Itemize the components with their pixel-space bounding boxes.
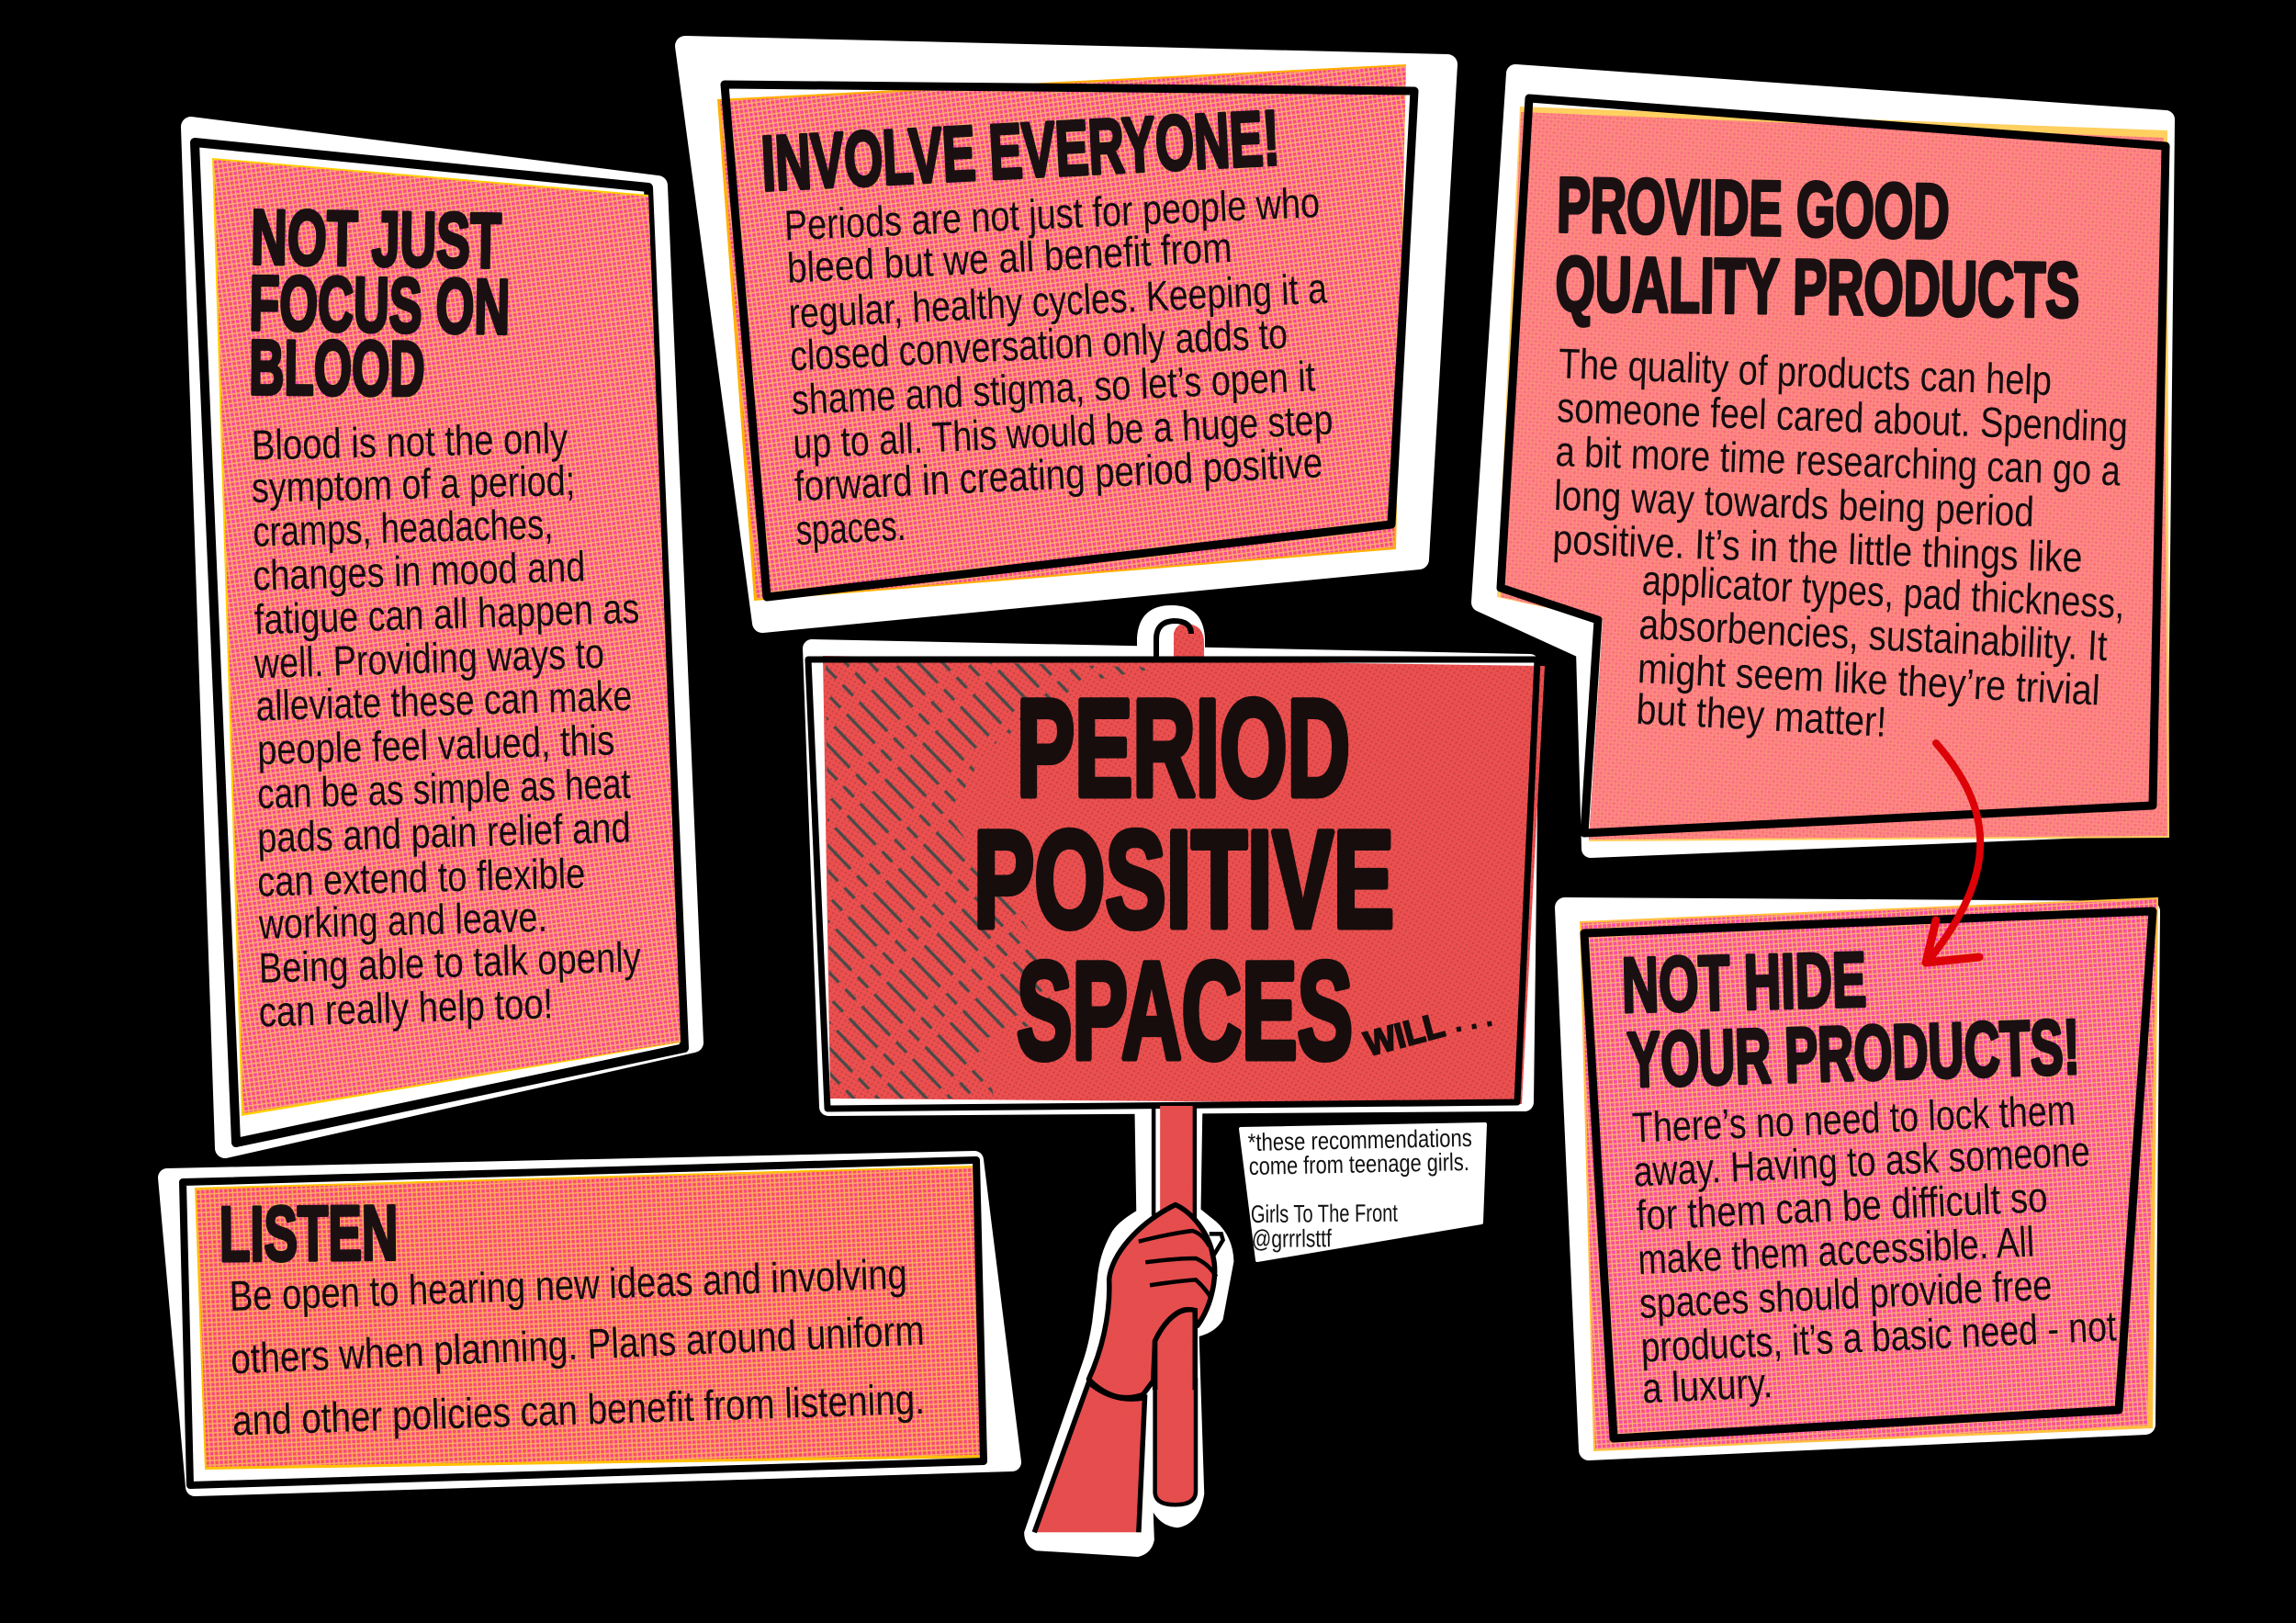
text: panel 1 heading and body: can be as simple as heat	[256, 760, 631, 817]
sign board	[808, 621, 1545, 1109]
pole	[1155, 1106, 1196, 1505]
text: panel 4 heading and body: There’s no need to lock them	[1631, 1086, 2077, 1152]
text: panel 1 heading and body: people feel valued, this	[256, 716, 615, 773]
title: period positive spaces: WILL	[1360, 1006, 1448, 1065]
text: panel 3 heading and body: a bit more time researching can go a	[1555, 427, 2122, 494]
pole inside fist	[1155, 1310, 1195, 1390]
text: panel 3 heading and body: but they matter!	[1635, 685, 1887, 746]
panel: not just focus on blood	[191, 127, 693, 1148]
text: panel 3 heading and body: PROVIDE GOOD	[1557, 162, 1950, 254]
text: panel 5 heading and body	[219, 1189, 926, 1445]
title: period positive spaces: PERIOD	[1017, 671, 1350, 825]
text: panel 1 heading and body: pads and pain relief and	[256, 804, 631, 862]
fingers	[1139, 1231, 1223, 1298]
text: panel 1 heading and body: cramps, headaches,	[253, 500, 554, 556]
text: panel 3 heading and body: absorbencies, sustainability. It	[1638, 600, 2109, 670]
footnote: @grrrlsttf	[1252, 1224, 1332, 1253]
text: panel 2 heading and body	[760, 95, 1334, 554]
text: panel 2 heading and body: up to all. This would be a huge step	[792, 395, 1334, 468]
text: panel 1 heading and body: BLOOD	[249, 324, 425, 412]
text: panel 1 heading and body: working and leave.	[257, 893, 547, 948]
text: panel 4 heading and body: NOT HIDE	[1621, 936, 1867, 1029]
text: panel 3 heading and body: might seem like they’re trivial	[1637, 644, 2101, 715]
title: period positive spaces: SPACES	[1017, 933, 1353, 1088]
sign with pole and hand	[808, 605, 1545, 1557]
text: panel 2 heading and body: regular, healthy cycles. Keeping it a	[787, 265, 1328, 337]
text: panel 4 heading and body: make them accessible. All	[1637, 1218, 2035, 1283]
text: panel 4 heading and body: for them can be difficult so	[1636, 1173, 2049, 1239]
white outline of pole, hand and arm	[1024, 1105, 1233, 1557]
text: panel 4 heading and body: a luxury.	[1641, 1358, 1773, 1412]
text: panel 3 heading and body: The quality of products can help	[1558, 339, 2053, 404]
arrow: red arrow from panel 3 to panel 4	[1926, 743, 1980, 963]
text: panel 3 heading and body: long way towards being period	[1553, 471, 2035, 535]
text: panel 5 heading and body: and other policies can benefit from listening.	[231, 1375, 926, 1445]
text: panel 2 heading and body: bleed but we all benefit from	[786, 223, 1232, 292]
title: period positive spaces: . . .	[1449, 996, 1496, 1040]
text: panel 1 heading and body: can really help too!	[258, 979, 554, 1036]
title: period positive spaces: POSITIVE	[974, 802, 1394, 956]
text: panel 1 heading and body: symptom of a period;	[251, 456, 576, 512]
text: panel 2 heading and body: spaces.	[794, 502, 906, 554]
text: panel 5 heading and body: LISTEN	[219, 1189, 399, 1278]
text: panel 1 heading and body: Being able to talk openly	[258, 932, 642, 992]
text: panel 4 heading and body: away. Having to ask someone	[1632, 1127, 2091, 1195]
text: panel 5 heading and body: Be open to hearing new ideas and involving	[229, 1250, 907, 1320]
white outline of pole top	[1137, 605, 1205, 666]
text: panel 4 heading and body: products, it’s a basic need - not	[1639, 1302, 2118, 1371]
footnote	[1241, 1124, 1485, 1260]
fist	[1088, 1205, 1215, 1398]
panel: not hide your products	[1565, 897, 2158, 1451]
text: panel 1 heading and body: changes in mood and	[253, 542, 586, 600]
panel: provide good quality products	[1480, 73, 2169, 849]
text: panel 2 heading and body: closed conversation only adds to	[789, 310, 1289, 379]
footnote: *these recommendations	[1247, 1124, 1472, 1156]
text: panel 3 heading and body: applicator types, pad thickness,	[1641, 556, 2126, 627]
text: panel 4 heading and body: spaces should provide free	[1638, 1261, 2053, 1327]
panel: involve everyone	[685, 46, 1447, 623]
title: period positive spaces	[974, 671, 1496, 1088]
text: panel 1 heading and body: can extend to flexible	[257, 849, 586, 906]
icon: pole top above sign	[1156, 621, 1204, 663]
hand holding pole	[1034, 1106, 1223, 1532]
footnote: come from teenage girls.	[1248, 1148, 1469, 1180]
sleeve	[1034, 1382, 1144, 1532]
text: panel 3 heading and body: positive. It’s in the little things like	[1552, 515, 2083, 581]
text: panel 2 heading and body: INVOLVE EVERYONE!	[760, 95, 1281, 207]
text: panel 4 heading and body	[1621, 936, 2118, 1412]
text: panel 1 heading and body: well. Providing ways to	[253, 629, 605, 687]
text: panel 3 heading and body	[1552, 162, 2129, 746]
text: panel 1 heading and body: Blood is not the only	[251, 414, 568, 469]
footnote: Girls To The Front	[1251, 1200, 1398, 1228]
text: panel 2 heading and body: shame and stigma, so let’s open it	[791, 352, 1316, 423]
text: panel 5 heading and body: others when planning. Plans around uniform	[230, 1306, 925, 1383]
text: panel 1 heading and body: NOT JUST	[250, 194, 501, 284]
panel: listen	[167, 1160, 1012, 1487]
text: panel 1 heading and body: FOCUS ON	[249, 260, 511, 350]
text: panel 2 heading and body: Periods are not just for people who	[783, 178, 1321, 249]
text: panel 1 heading and body: fatigue can all happen as	[253, 584, 640, 643]
text: panel 1 heading and body	[249, 194, 642, 1036]
text: panel 2 heading and body: forward in creating period positive	[793, 438, 1323, 510]
text: panel 1 heading and body: alleviate these can make	[255, 671, 633, 729]
text: panel 3 heading and body: someone feel cared about. Spending	[1556, 383, 2129, 451]
